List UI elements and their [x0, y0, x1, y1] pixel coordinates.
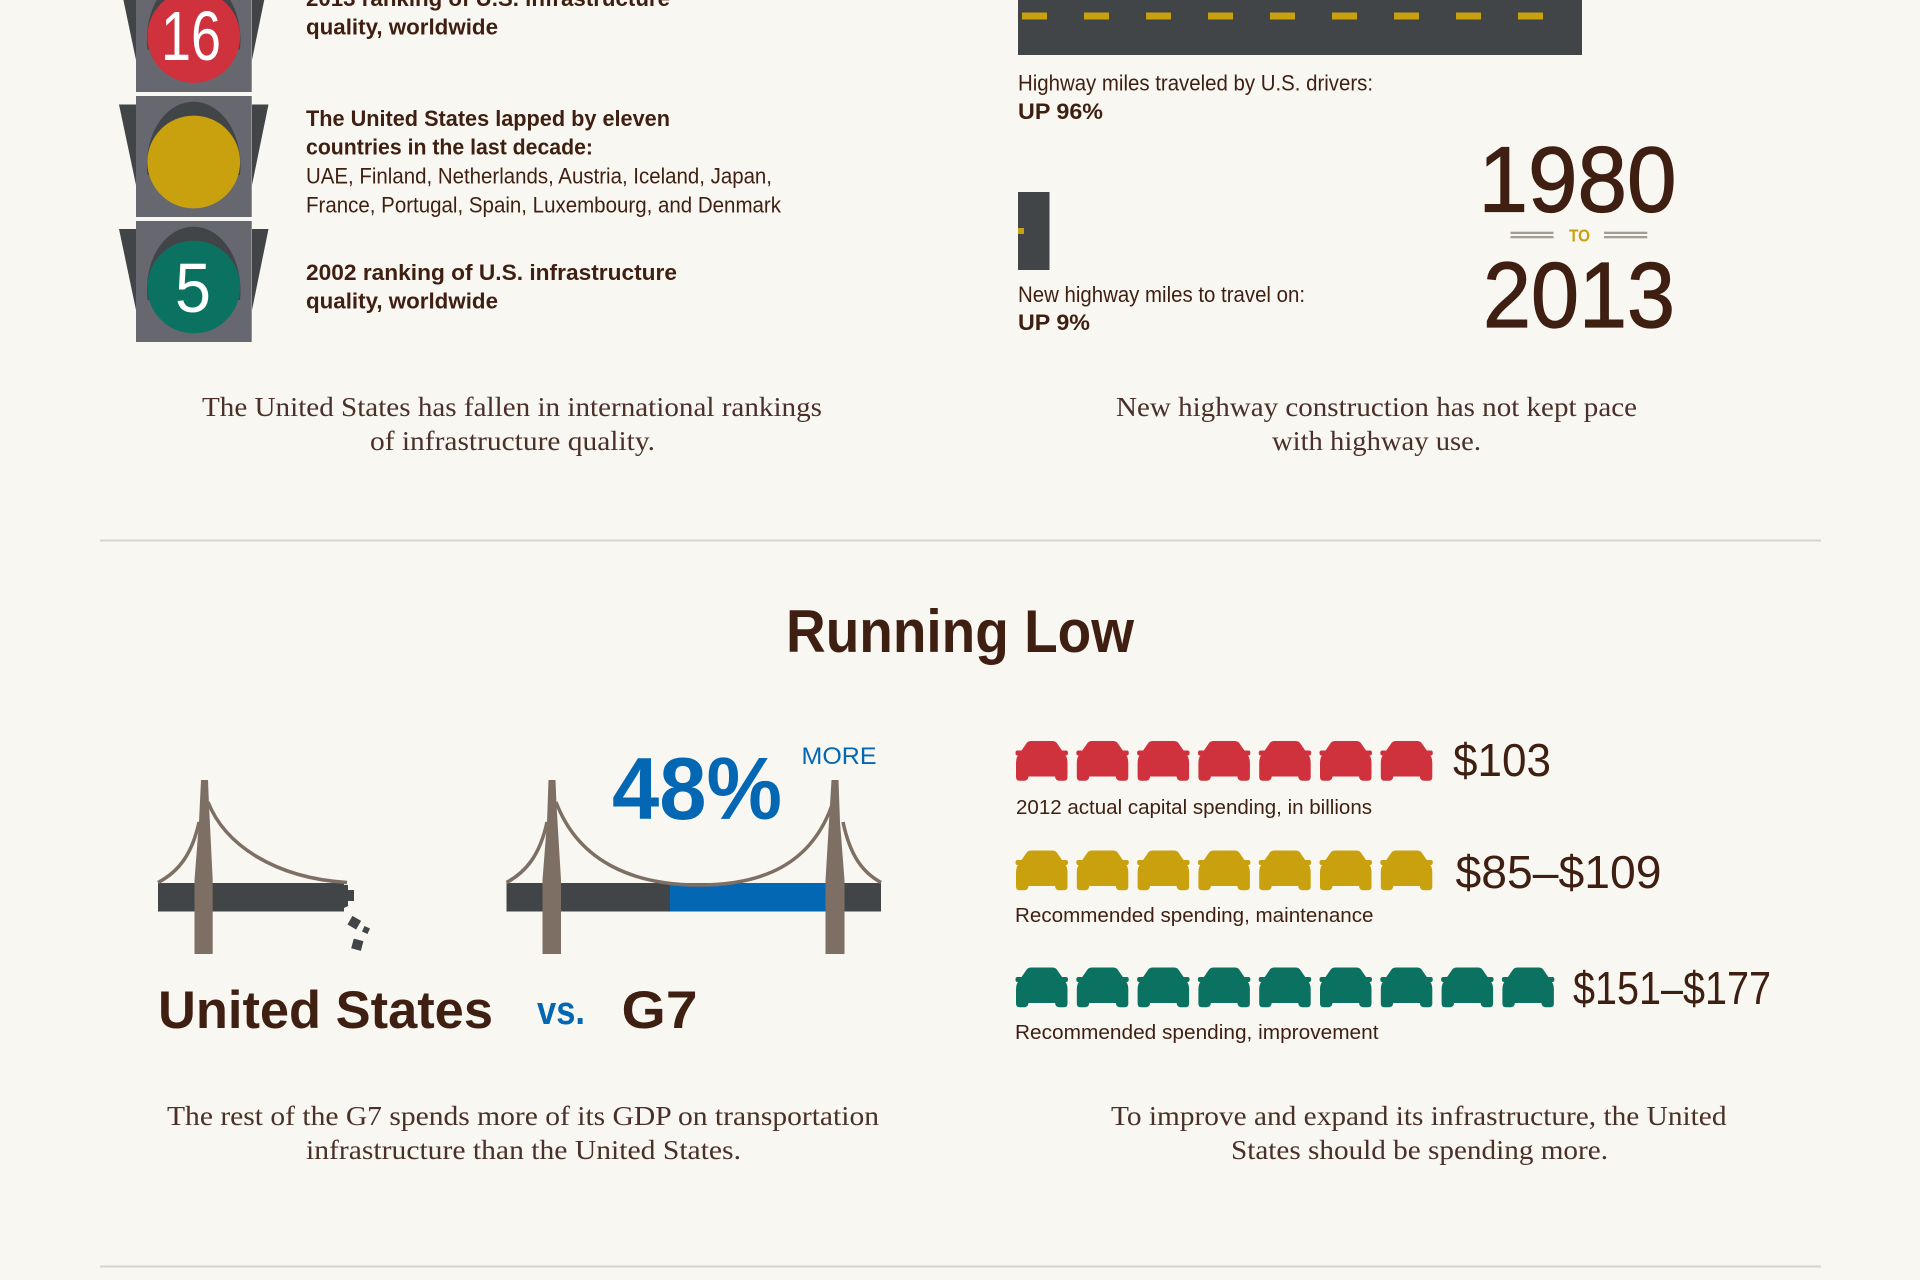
label: improvement: Recommended spending, improvement: [1015, 1022, 1379, 1044]
stat: 48% more: MORE: [802, 743, 876, 770]
panel: highway use: [1018, 0, 1676, 456]
row: actual spending: [1016, 734, 1551, 819]
years: 1980 to 2013: 1980: [1478, 128, 1676, 232]
icon: red cars: [1016, 741, 1433, 781]
text: new miles: [1018, 282, 1305, 335]
text: miles traveled: UP 96%: [1018, 99, 1103, 124]
text: 2002 ranking: quality, worldwide: [306, 288, 498, 314]
icon: long road: [1018, 0, 1582, 55]
stat: 48% more: [612, 739, 876, 838]
caption: highway construction: New highway construction has not kept pace: [1116, 392, 1637, 422]
text: new miles: New highway miles to travel on:: [1018, 282, 1305, 307]
value: $103: $103: [1453, 734, 1551, 786]
panel: recommended spending: [1015, 734, 1771, 1165]
caption: spending more: States should be spending more.: [1231, 1135, 1608, 1165]
value: $85-$109: $85–$109: [1456, 846, 1662, 898]
heading: United States vs. G7: G7: [622, 981, 698, 1040]
caption: G7 spending: The rest of the G7 spends more of its GDP on transportation: [167, 1101, 880, 1131]
caption: highway construction: with highway use.: [1272, 426, 1481, 456]
text: new miles: UP 9%: [1018, 310, 1090, 335]
text: 2002 ranking: 2002 ranking of U.S. infrastructure: [306, 260, 677, 285]
text: lapped countries: France, Portugal, Spain, Luxembourg, and Denmark: [306, 192, 782, 218]
heading: United States vs. G7: [158, 981, 698, 1040]
label: actual spending: 2012 actual capital spending, in billions: [1016, 797, 1372, 819]
text: miles traveled: Highway miles traveled by U.S. drivers:: [1018, 70, 1373, 96]
caption: rankings: [202, 392, 822, 456]
stat: 48% more: 48%: [612, 739, 782, 838]
caption: highway construction: [1116, 392, 1637, 456]
years: 1980 to 2013: TO: [1569, 226, 1590, 246]
text: lapped countries: The United States lapped by eleven: [306, 106, 670, 131]
heading: United States vs. G7: United States: [158, 981, 493, 1040]
text: 2013 ranking: [306, 0, 670, 40]
panel: traffic light rankings: [119, 0, 822, 456]
text: 2002 ranking: [306, 260, 677, 314]
text: lapped countries: UAE, Finland, Netherlands, Austria, Iceland, Japan,: [306, 164, 772, 188]
years: 1980 to 2013: 2013: [1483, 243, 1675, 347]
label: maintenance: Recommended spending, maintenance: [1015, 905, 1374, 927]
icon: G7 bridge: [506, 780, 881, 954]
caption: G7 spending: [167, 1101, 880, 1165]
text: 2013 ranking: quality, worldwide: [306, 14, 498, 40]
row: improvement: [1015, 962, 1771, 1044]
panel: G7 comparison: [158, 739, 881, 1165]
caption: rankings: The United States has fallen in international rankings: [202, 392, 822, 422]
text: lapped countries: [306, 106, 782, 218]
text: miles traveled: [1018, 70, 1373, 124]
heading: United States vs. G7: vs.: [537, 989, 585, 1033]
icon: gold cars: [1016, 850, 1433, 890]
years: 1980 to 2013: [1478, 128, 1676, 347]
caption: G7 spending: infrastructure than the United States.: [306, 1135, 741, 1165]
caption: spending more: [1111, 1101, 1727, 1165]
icon: green cars: [1016, 968, 1554, 1007]
row: maintenance: [1015, 846, 1662, 927]
icon: traffic light: 5: [175, 249, 211, 327]
heading: Running Low: Running Low: [786, 598, 1134, 665]
caption: spending more: To improve and expand its infrastructure, the United: [1111, 1101, 1727, 1131]
icon: short road: [1018, 192, 1050, 270]
caption: rankings: of infrastructure quality.: [370, 426, 655, 456]
icon: traffic light: [119, 0, 268, 342]
icon: broken US bridge: [158, 780, 370, 954]
text: lapped countries: countries in the last decade:: [306, 134, 593, 160]
value: $151-$177: $151–$177: [1573, 962, 1771, 1014]
